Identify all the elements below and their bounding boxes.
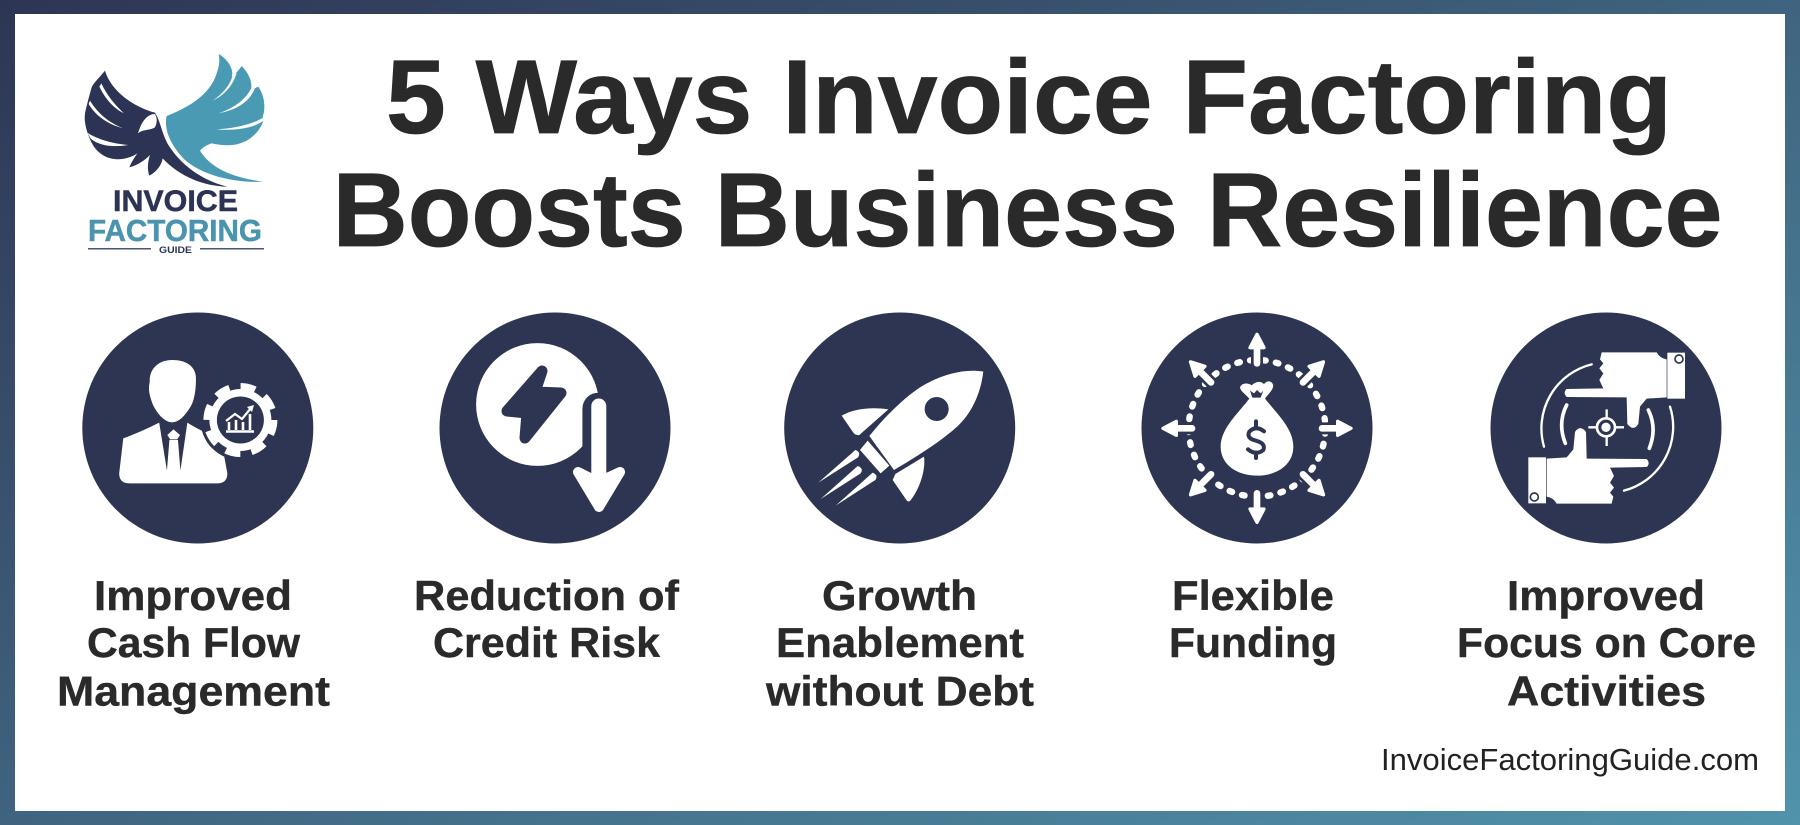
logo: Invoice Factoring Guide [85,54,265,256]
label: Cash Flow [87,619,300,666]
label: Flexible [1172,572,1334,619]
money bag [1221,381,1293,476]
target [1597,418,1615,436]
label: Enablement [776,619,1024,666]
logo word: FACTORING: FACTORING [88,213,262,248]
window [925,397,949,421]
website url: InvoiceFactoringGuide.com [1381,743,1759,777]
logo word: GUIDE: GUIDE [159,245,192,256]
eagle head highlight [138,114,157,133]
inner arcs [1562,405,1653,448]
dotted ring [1189,360,1325,497]
bottom hand [1528,428,1649,504]
title line 1: 5 Ways Invoice Factoring [386,39,1672,156]
tie knot [167,429,180,439]
arrows [1163,334,1351,522]
label: Credit Risk [433,619,661,666]
label: Focus on Core [1457,619,1756,666]
label: Management [57,668,330,714]
icon: eagle [85,54,265,187]
label: Growth [822,572,977,619]
suit [119,423,227,483]
teal wing feather slits [213,73,265,130]
gear [200,380,280,460]
icon circle: businessman with gear [82,312,313,544]
arrow down [591,406,606,478]
bolt [507,371,561,438]
top fin [842,408,888,435]
panel: Improved Cash Flow Management [57,312,330,714]
label: without Debt [765,668,1034,714]
icon circle: energy reduction [440,312,670,544]
label: Activities [1507,668,1706,714]
outer arcs [1541,364,1673,491]
label: Improved [1507,572,1705,619]
head [149,360,196,422]
dollar sign [1248,421,1264,458]
icon circle: rocket [784,312,1015,544]
panel: Improved Focus on Core Activities [1457,312,1768,714]
lower fin [893,457,924,501]
label: Reduction of [414,572,680,619]
panel: Reduction of Credit Risk [414,312,691,666]
top hand [1565,352,1685,428]
rocket body [869,371,983,470]
eagle dark wing and body [85,71,227,187]
label: Funding [1169,619,1337,666]
panel: Growth Enablement without Debt [765,312,1036,714]
icon circle: hands framing target [1490,312,1722,544]
band [860,441,889,473]
logo word: INVOICE: INVOICE [113,185,238,218]
title [332,39,1722,269]
label: Improved [94,572,292,619]
eagle teal wing [166,54,264,182]
arrow cut-out [582,393,615,478]
icon circle: money bag with arrows [1142,312,1372,544]
title line 2: Boosts Business Resilience [332,152,1722,269]
flames [818,450,859,483]
dark wing feather slits [87,83,128,146]
panel: Flexible Funding [1142,312,1372,666]
